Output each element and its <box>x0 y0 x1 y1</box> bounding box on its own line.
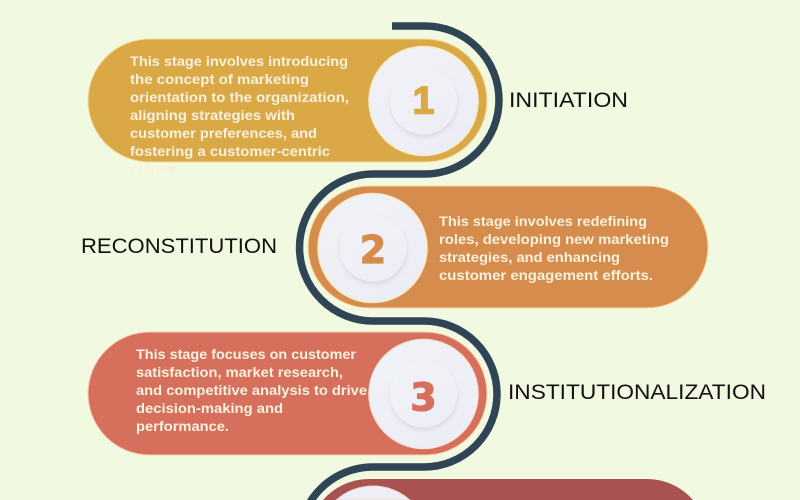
stage 3 description: performance. <box>136 419 229 434</box>
stage 1 description: culture. <box>130 162 182 177</box>
panel: stage 2 <box>308 186 708 308</box>
connector line: winding path <box>300 26 499 500</box>
stage 1 description: customer preferences, and <box>130 126 317 141</box>
stage 2 description: This stage involves redefining <box>439 214 647 229</box>
stage 4 number disc <box>336 486 410 500</box>
label: institutionalization: INSTITUTIONALIZATION <box>508 381 766 404</box>
stage 3 description: This stage focuses on customer <box>136 347 357 362</box>
stage 3 description: decision-making and <box>136 401 283 416</box>
stage 3 description: satisfaction, market research, <box>136 365 343 380</box>
stage 2 description <box>439 214 669 283</box>
stage 1 description: aligning strategies with <box>130 108 295 123</box>
stage 1 description <box>130 54 349 177</box>
label: reconstitution: RECONSTITUTION <box>81 235 277 258</box>
stage 3 number: 3 <box>410 376 437 420</box>
stage 2 description: roles, developing new marketing <box>439 232 669 247</box>
panel: stage 4 <box>323 479 693 500</box>
stage 2 description: customer engagement efforts. <box>439 268 653 283</box>
stage 1 description: This stage involves introducing <box>130 54 348 69</box>
stage 1 description: fostering a customer-centric <box>130 144 331 159</box>
stage 4 pill <box>323 479 693 500</box>
label: initiation: INITIATION <box>509 89 628 112</box>
stage 1 number disc <box>369 46 478 156</box>
stage 2 number: 2 <box>360 228 386 272</box>
stage 2 pill <box>308 186 708 308</box>
stage 3 description: and competitive analysis to drive <box>136 383 368 398</box>
stage 1 pill <box>88 39 487 162</box>
stage 3 pill <box>88 332 487 455</box>
stage 1 description: the concept of marketing <box>130 72 309 87</box>
stage 1 number: 1 <box>413 80 434 122</box>
stage 2 description: strategies, and enhancing <box>439 250 620 265</box>
stage 2 number disc <box>318 194 427 302</box>
panel: stage 1 <box>88 39 487 177</box>
stage 3 description <box>136 347 368 434</box>
stage 1 description: orientation to the organization, <box>130 90 349 105</box>
stage 3 number disc <box>369 340 478 448</box>
panel: stage 3 <box>88 332 487 455</box>
